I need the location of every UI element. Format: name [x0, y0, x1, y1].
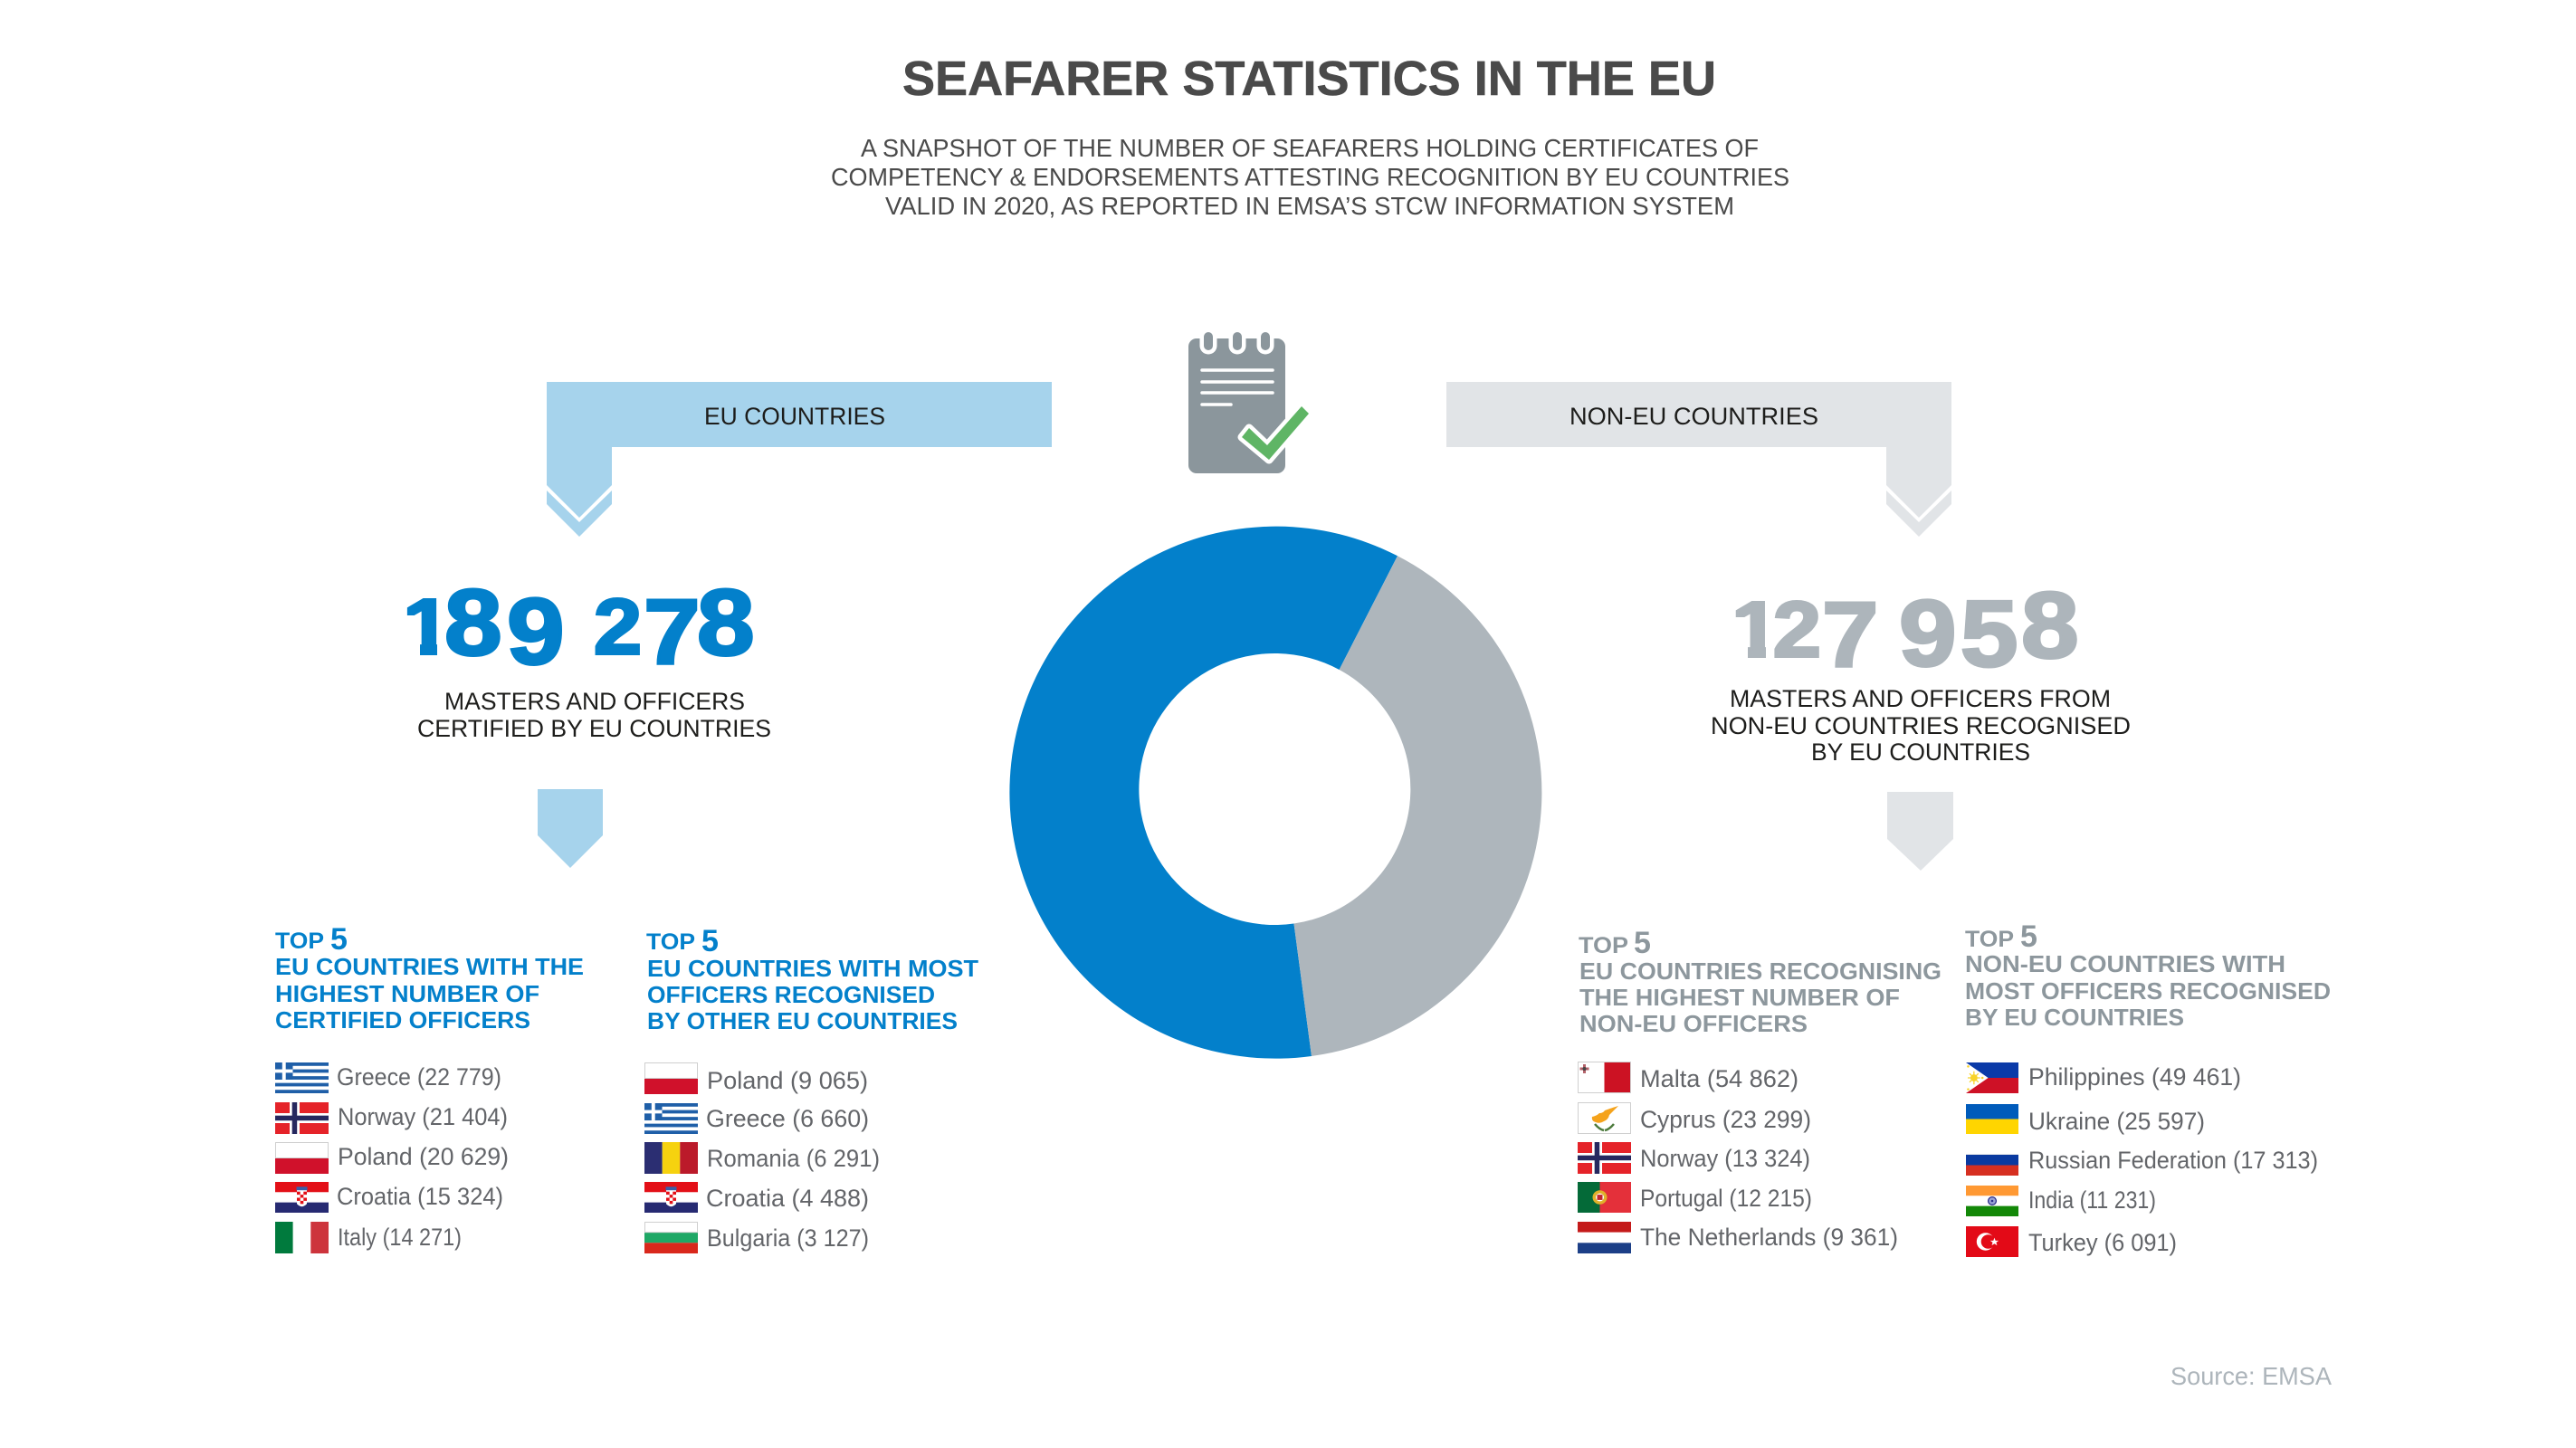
subtitle: COMPETENCY & ENDORSEMENTS ATTESTING RECOGNITION BY EU COUNTRIES	[831, 163, 1789, 191]
row: Portugal: Portugal (12 215)	[1640, 1185, 1812, 1212]
row: Philippines	[1966, 1062, 2241, 1093]
big number: non-EU total: 9	[1899, 581, 1957, 686]
row: Poland: Poland (20 629)	[338, 1143, 509, 1170]
row: Philippines: Philippines (49 461)	[2028, 1063, 2241, 1091]
big number: non-EU total: 1	[1732, 586, 1779, 674]
source note: Source: EMSA	[2171, 1362, 2332, 1390]
caption: non-EU total	[1711, 685, 2131, 766]
row: India: India (11 231)	[2028, 1186, 2156, 1214]
big number: non-EU total: 5	[1961, 582, 2018, 687]
row: Norway: Norway (13 324)	[1640, 1145, 1810, 1172]
caption: EU total: CERTIFIED BY EU COUNTRIES	[417, 715, 771, 742]
row: India	[1966, 1186, 2156, 1216]
heading: EU COUNTRIES WITH THE	[275, 953, 584, 980]
heading: CERTIFIED OFFICERS	[275, 1006, 530, 1034]
heading: NON-EU OFFICERS	[1579, 1010, 1808, 1037]
row: Norway	[275, 1102, 508, 1134]
row: Romania: Romania (6 291)	[707, 1145, 880, 1172]
row: The Netherlands	[1578, 1222, 1898, 1253]
heading: EU COUNTRIES WITH MOST	[647, 955, 978, 982]
row: Bulgaria	[644, 1222, 869, 1253]
slice: non-EU countries	[1294, 556, 1541, 1056]
big number: non-EU total: 7	[1822, 583, 1878, 686]
row: Cyprus	[1578, 1102, 1811, 1134]
heading: TOP	[1579, 933, 1628, 958]
row: Croatia	[644, 1182, 869, 1213]
big number: EU total: 8	[697, 570, 755, 675]
heading	[1579, 926, 1942, 1037]
row: Greece	[275, 1062, 501, 1093]
panel: top 5 non-EU countries recognised	[1965, 919, 2331, 1257]
row: Greece: Greece (22 779)	[337, 1063, 501, 1091]
big number: EU total: 2	[594, 583, 642, 672]
heading: HIGHEST NUMBER OF	[275, 980, 539, 1007]
big number: non-EU total: 2	[1773, 586, 1821, 674]
arrow banner: EU countries	[547, 382, 1052, 537]
caption: non-EU total: BY EU COUNTRIES	[1811, 738, 2030, 766]
big number: EU total: 1	[403, 583, 451, 672]
row: Russian Federation: Russian Federation (17 313)	[2028, 1147, 2318, 1174]
caption: non-EU total: NON-EU COUNTRIES RECOGNISED	[1711, 712, 2131, 739]
big number: EU total: 7	[644, 580, 701, 683]
row: Turkey	[1966, 1226, 2177, 1257]
row: Romania	[644, 1142, 880, 1174]
heading: THE HIGHEST NUMBER OF	[1579, 984, 1900, 1011]
row: Ukraine	[1966, 1104, 2205, 1135]
heading: EU COUNTRIES RECOGNISING	[1579, 957, 1942, 985]
row: Italy	[275, 1222, 462, 1253]
row: The Netherlands: The Netherlands (9 361)	[1640, 1224, 1898, 1251]
heading	[275, 922, 584, 1034]
heading: BY OTHER EU COUNTRIES	[647, 1007, 958, 1034]
arrow banner: non-EU countries	[1446, 382, 1951, 537]
row: Malta	[1578, 1062, 1798, 1093]
row: Poland: Poland (9 065)	[707, 1067, 868, 1094]
row: Turkey: Turkey (6 091)	[2028, 1229, 2177, 1256]
slice: EU countries	[1009, 527, 1398, 1059]
subtitle: A SNAPSHOT OF THE NUMBER OF SEAFARERS HOLDING CERTIFICATES OF	[861, 134, 1759, 162]
heading: MOST OFFICERS RECOGNISED	[1965, 977, 2331, 1005]
row: Malta: Malta (54 862)	[1640, 1065, 1798, 1092]
heading	[646, 924, 978, 1034]
arrow: non-EU down	[1887, 792, 1953, 871]
panel: top 5 EU countries recognised	[644, 924, 978, 1253]
heading: TOP	[1965, 927, 2014, 952]
icon: notepad with check mark	[1188, 337, 1309, 473]
arrow: EU down	[538, 789, 603, 868]
row: Ukraine: Ukraine (25 597)	[2028, 1108, 2205, 1135]
heading: BY EU COUNTRIES	[1965, 1004, 2184, 1031]
row: Italy: Italy (14 271)	[338, 1224, 462, 1251]
subtitle: VALID IN 2020, AS REPORTED IN EMSA’S STCW INFORMATION SYSTEM	[885, 192, 1734, 220]
big number: EU total: 8	[444, 570, 502, 675]
row: Croatia: Croatia (4 488)	[706, 1185, 869, 1212]
row: Poland	[275, 1142, 509, 1174]
heading	[1965, 919, 2331, 1031]
caption: EU total	[417, 688, 771, 742]
heading: NON-EU COUNTRIES WITH	[1965, 950, 2285, 977]
row: Bulgaria: Bulgaria (3 127)	[707, 1224, 869, 1252]
heading: 5	[701, 924, 719, 958]
heading: 5	[2020, 919, 2037, 954]
row: Poland	[644, 1062, 868, 1094]
heading: TOP	[275, 929, 324, 954]
heading: OFFICERS RECOGNISED	[647, 981, 935, 1008]
row: Croatia: Croatia (15 324)	[337, 1183, 503, 1210]
row: Greece: Greece (6 660)	[706, 1105, 869, 1132]
big number: EU total: 9	[507, 579, 565, 684]
caption: EU total: MASTERS AND OFFICERS	[444, 688, 745, 715]
heading: TOP	[646, 929, 695, 955]
heading: 5	[1634, 926, 1651, 960]
big number: non-EU total	[1736, 590, 2077, 668]
row: Portugal	[1578, 1182, 1812, 1213]
row: Norway	[1578, 1142, 1810, 1174]
row: Croatia	[275, 1182, 503, 1213]
arrow banner: non-EU countries: NON-EU COUNTRIES	[1569, 403, 1818, 430]
row: Greece	[644, 1103, 869, 1134]
donut chart	[1009, 527, 1541, 1059]
title: SEAFARER STATISTICS IN THE EU	[902, 52, 1716, 106]
big number: non-EU total: 8	[2021, 573, 2079, 678]
big number: EU total	[407, 588, 753, 666]
heading: 5	[330, 922, 348, 957]
caption: non-EU total: MASTERS AND OFFICERS FROM	[1730, 685, 2111, 712]
arrow banner: EU countries: EU COUNTRIES	[704, 403, 885, 430]
panel: top 5 EU countries recognising non-EU officers	[1578, 926, 1942, 1253]
row: Norway: Norway (21 404)	[338, 1103, 508, 1130]
row: Cyprus: Cyprus (23 299)	[1640, 1106, 1811, 1133]
subtitle	[831, 134, 1789, 220]
panel: top 5 EU countries certified officers	[275, 922, 584, 1253]
